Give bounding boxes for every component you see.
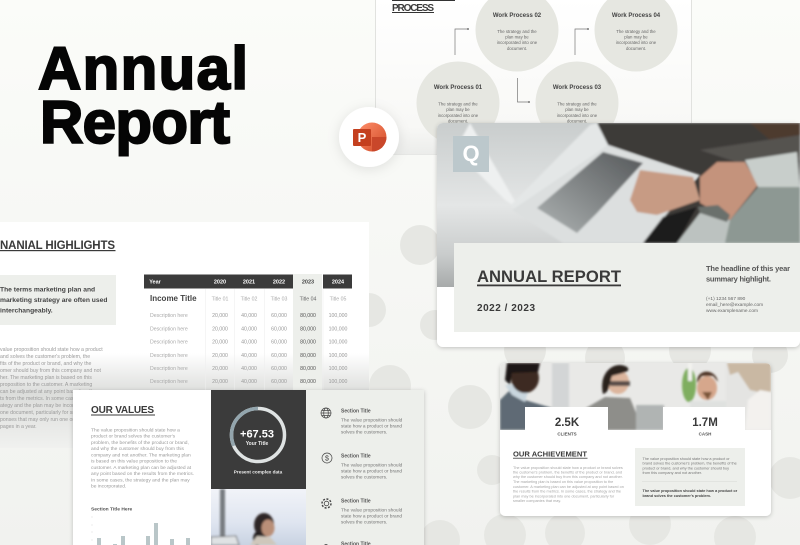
section 3: solves the customers.	[341, 520, 387, 526]
stat: cash	[663, 407, 745, 440]
table: 40,000	[241, 366, 257, 372]
body text: one document, particularly for smaller	[0, 410, 87, 416]
section 3	[341, 498, 403, 526]
circle: work process 02	[476, 0, 558, 72]
table: 20,000	[212, 353, 228, 359]
stat: cash: 1.7M	[692, 417, 718, 429]
circle: work process 01: Work Process 01	[434, 85, 483, 91]
section 3: Section Title	[341, 498, 371, 504]
body text	[513, 466, 624, 503]
body text: customer. A marketing plan can be adjusted at	[91, 465, 192, 471]
table: 60,000	[271, 313, 287, 319]
table: Title 05	[330, 296, 347, 302]
table: 20,000	[212, 379, 228, 385]
body text: The marketing plan is based on this value proposition to the	[513, 480, 613, 484]
cover text panel: summary highlight.	[706, 274, 771, 284]
table: 100,000	[329, 353, 347, 359]
body text: ategy and the plan may be incorporated	[0, 403, 92, 409]
circle: work process 04: document.	[626, 46, 646, 51]
section 2: state how a product or brand	[341, 468, 402, 474]
body text: and why the customer should buy from this	[91, 446, 185, 452]
callout box: The terms marketing plan and	[0, 286, 95, 294]
body text: company and not another. The marketing plan	[91, 452, 191, 458]
panel: process	[376, 0, 692, 155]
cover text panel: email_here@example.com	[706, 302, 763, 308]
table: 20,000	[212, 326, 228, 332]
table: 80,000	[300, 340, 316, 346]
section 4	[324, 542, 371, 545]
table: Description here	[150, 313, 188, 319]
table: 20,000	[212, 313, 228, 319]
circle: work process 02: incorporated into one	[497, 40, 538, 45]
table: Income Title	[150, 294, 197, 303]
callout box: brand solves the customer's problem, the benefits of the	[642, 462, 737, 466]
table: Description here	[150, 340, 188, 346]
cover text panel: The headline of this year	[706, 264, 790, 273]
stat: cash: CASH	[699, 432, 711, 436]
table: 100,000	[329, 313, 347, 319]
section 3: state how a product or brand	[341, 514, 402, 520]
section 1: solves the customers.	[341, 430, 387, 436]
icon: dollar	[322, 453, 332, 463]
body text: her. The marketing plan is based on this	[0, 375, 92, 381]
body text: value proposition should state how a product	[0, 347, 103, 353]
kpi panel: Present complex data	[234, 470, 283, 474]
table: 80,000	[300, 326, 316, 332]
arrow: 03 to 04	[575, 28, 589, 55]
cover text panel: www.examplename.com	[706, 308, 758, 314]
body text: The value proposition should state how a	[91, 428, 180, 434]
table	[144, 274, 352, 399]
panel: financial highlights	[0, 222, 369, 448]
callout box	[0, 275, 116, 325]
cover text panel	[454, 243, 800, 332]
callout box	[635, 448, 745, 506]
cover text panel: (+1) 1234 567 890	[706, 296, 746, 302]
table: 60,000	[271, 326, 287, 332]
callout box: The value proposition should state how a product or	[642, 457, 730, 461]
circle: work process 03: incorporated into one	[557, 113, 598, 118]
stat: clients	[525, 407, 608, 440]
heading: financial highlights: NANIAL HIGHLIGHTS	[0, 240, 115, 252]
callout box: from this company and not another.	[642, 471, 702, 475]
table: 2022	[273, 280, 285, 286]
kpi panel: +67.53	[240, 428, 274, 440]
table: 2023	[302, 280, 314, 286]
kpi panel: Your Title	[246, 441, 269, 447]
circle: work process 01: incorporated into one	[438, 113, 479, 118]
arrow: 01 to 02	[455, 28, 469, 55]
body text: proposition to the customer. A marketing	[0, 382, 92, 388]
body text	[0, 347, 103, 430]
table: 60,000	[271, 353, 287, 359]
icon: gear	[322, 499, 331, 508]
photo: laptop and hands	[437, 123, 800, 288]
section 1	[341, 408, 403, 436]
body text: can be adjusted at any point based on the	[0, 389, 96, 395]
circle: work process 04: plan may be	[624, 34, 648, 40]
body text	[91, 428, 194, 490]
table: 80,000	[300, 353, 316, 359]
logo	[453, 136, 489, 172]
logo: Q	[462, 141, 480, 166]
kpi panel	[211, 390, 306, 489]
table: Description here	[150, 353, 188, 359]
bar chart	[91, 506, 190, 545]
body text: any point based on the results from the metrics.	[91, 471, 194, 477]
body text: omer should buy from this company and not	[0, 368, 101, 374]
heading: process	[392, 0, 455, 14]
section 2: solves the customers.	[341, 474, 387, 480]
title	[38, 35, 248, 156]
table: 60,000	[271, 340, 287, 346]
body text: In some cases, the strategy and the plan may	[91, 477, 190, 483]
table: 40,000	[241, 353, 257, 359]
table: Title 04	[300, 296, 317, 302]
circle: work process 03: The strategy and the	[557, 102, 597, 106]
body text: be incorporated.	[91, 484, 126, 490]
section 2: Section Title	[341, 454, 371, 460]
circle: work process 01	[416, 62, 500, 144]
table: 20,000	[212, 340, 228, 346]
icon: globe	[321, 408, 331, 418]
circle: work process 02: Work Process 02	[493, 13, 542, 19]
circle: work process 04: incorporated into one	[616, 40, 657, 45]
panel: our achievement	[500, 363, 771, 516]
icon: powerpoint badge	[339, 107, 399, 167]
body text: product or brand solves the customer's	[91, 434, 176, 440]
panel: annual report cover	[437, 123, 800, 347]
table: Title 01	[212, 296, 229, 302]
body text: the results from the metrics. In some cases, the strategy and the	[513, 490, 621, 494]
body text: and solves the customer's problem, the	[0, 354, 90, 360]
table: 2020	[214, 280, 226, 286]
section 1: state how a product or brand	[341, 424, 402, 430]
table: 40,000	[241, 340, 257, 346]
body text: why the customer should buy from this company and not another.	[513, 475, 623, 479]
body text: fits of the product or brand, and why the	[0, 361, 92, 367]
callout box: interchangeably.	[0, 308, 53, 314]
body text: is based on this value proposition to the	[91, 458, 177, 464]
section 1: Section Title	[341, 408, 371, 414]
table: 60,000	[271, 366, 287, 372]
stat: clients: CLIENTS	[557, 432, 577, 436]
table: 60,000	[271, 379, 287, 385]
table: 2024	[332, 280, 345, 286]
circle: work process 01: plan may be	[446, 107, 470, 112]
table: Description here	[150, 326, 188, 332]
arrow: 02 to 03	[518, 78, 530, 103]
icon: powerpoint badge: P	[358, 130, 367, 145]
body text: smaller companies that may.	[513, 499, 561, 503]
table: 80,000	[300, 379, 316, 385]
circle: work process 04: The strategy and the	[616, 29, 656, 34]
body text: ponses that may only run one or two	[0, 417, 84, 423]
circle: work process 03	[536, 62, 618, 123]
stat: clients: 2.5K	[555, 417, 580, 429]
section 2	[341, 454, 403, 480]
table: 20,000	[212, 366, 228, 372]
table: 100,000	[329, 379, 347, 385]
title: Annual	[38, 35, 248, 102]
circle: work process 04: Work Process 04	[612, 13, 661, 19]
body text: customer. A marketing plan can be adjusted at any point based on	[513, 485, 624, 489]
body text: ts from the metrics. In some cases, the	[0, 396, 89, 402]
callout box: brand solves the customer's problem.	[642, 494, 711, 498]
body text: The value proposition should state how a product or brand solves	[513, 466, 623, 470]
gauge ring	[231, 408, 284, 462]
heading: our values: OUR VALUES	[91, 405, 154, 416]
circle: work process 02: document.	[507, 46, 527, 51]
circle: work process 01: document.	[448, 118, 468, 124]
section 3: The value proposition should	[341, 508, 403, 514]
sections panel	[306, 390, 424, 545]
table: 2021	[243, 280, 255, 286]
table: Description here	[150, 366, 188, 372]
table: 100,000	[329, 366, 347, 372]
bar chart: Section Title Here	[91, 506, 133, 512]
section 2: The value proposition should	[341, 462, 403, 468]
circle: work process 04	[594, 0, 678, 72]
table: Title 03	[271, 296, 288, 302]
body text: pages in a year.	[0, 424, 37, 430]
table: 40,000	[241, 379, 257, 385]
table: Year	[149, 280, 162, 286]
circle: work process 02: The strategy and the	[497, 29, 537, 34]
panel: our values	[73, 390, 424, 545]
circle: work process 01: The strategy and the	[438, 102, 478, 106]
table: 40,000	[241, 313, 257, 319]
circle: work process 02: plan may be	[505, 34, 529, 40]
cover text panel: ANNUAL REPORT	[477, 267, 621, 286]
circle: work process 03: Work Process 03	[553, 85, 602, 91]
body text: plan may be incorporated into one document, particularly for	[513, 494, 615, 498]
body text: problem, the benefits of the product or brand,	[91, 440, 189, 446]
callout box: marketing strategy are often used	[0, 297, 107, 304]
table: Description here	[150, 379, 188, 385]
section 1: The value proposition should	[341, 418, 403, 424]
callout box: The value proposition should state how a product or	[642, 489, 738, 493]
table: 80,000	[300, 313, 316, 319]
table: Title 02	[241, 296, 258, 302]
heading: process: PROCESS	[392, 3, 434, 14]
callout box: product or brand, and why the customer should buy	[642, 466, 729, 470]
cover text panel: 2022 / 2023	[477, 303, 535, 314]
heading: our achievement: OUR ACHIEVEMENT	[513, 450, 587, 458]
table: 40,000	[241, 326, 257, 332]
table: 80,000	[300, 366, 316, 372]
photo: team	[500, 363, 771, 430]
table: 100,000	[329, 326, 347, 332]
table: 100,000	[329, 340, 347, 346]
title: Report	[40, 89, 230, 156]
circle: work process 03: plan may be	[565, 107, 589, 112]
circle: work process 03: document.	[567, 118, 587, 124]
icon: dollar: $	[325, 456, 329, 462]
body text: the customer's problem, the benefits of the product or brand, and	[513, 470, 622, 474]
photo: woman at window	[211, 489, 306, 545]
